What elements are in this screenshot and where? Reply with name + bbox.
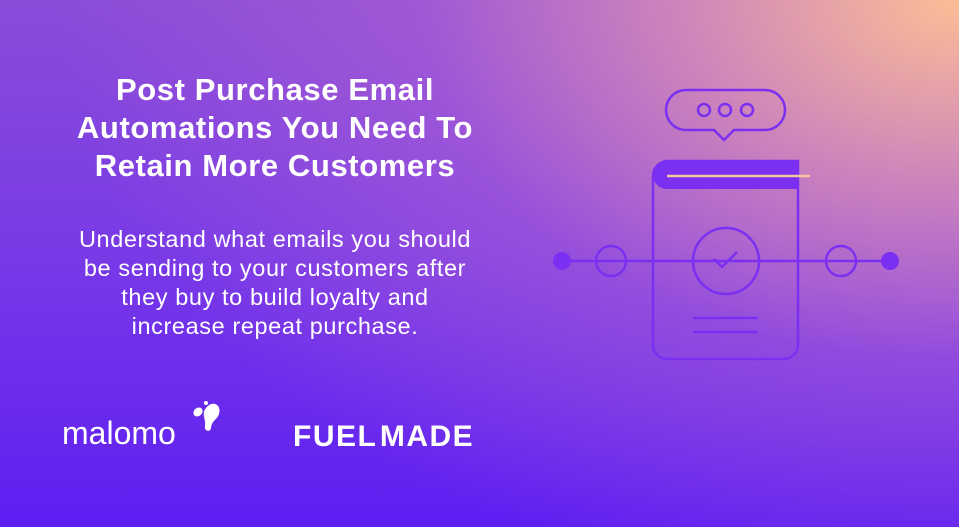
icon: speech bubble (666, 90, 785, 140)
icon: butterfly (193, 401, 220, 431)
logo: malomo: malomo (62, 415, 176, 451)
icon: check circle (693, 228, 759, 294)
subtitle: increase repeat purchase. (132, 313, 418, 339)
title: Retain More Customers (95, 148, 455, 183)
logo: malomo (62, 401, 220, 451)
logo: fuelmade: FUEL MADE (293, 420, 474, 453)
title (77, 72, 473, 183)
title: Post Purchase Email (116, 72, 434, 107)
icon: phone (653, 161, 798, 359)
subtitle: be sending to your customers after (84, 255, 466, 281)
timeline (562, 246, 890, 276)
subtitle: they buy to build loyalty and (121, 284, 429, 310)
subtitle (79, 226, 471, 339)
title: Automations You Need To (77, 110, 473, 145)
subtitle: Understand what emails you should (79, 226, 471, 252)
